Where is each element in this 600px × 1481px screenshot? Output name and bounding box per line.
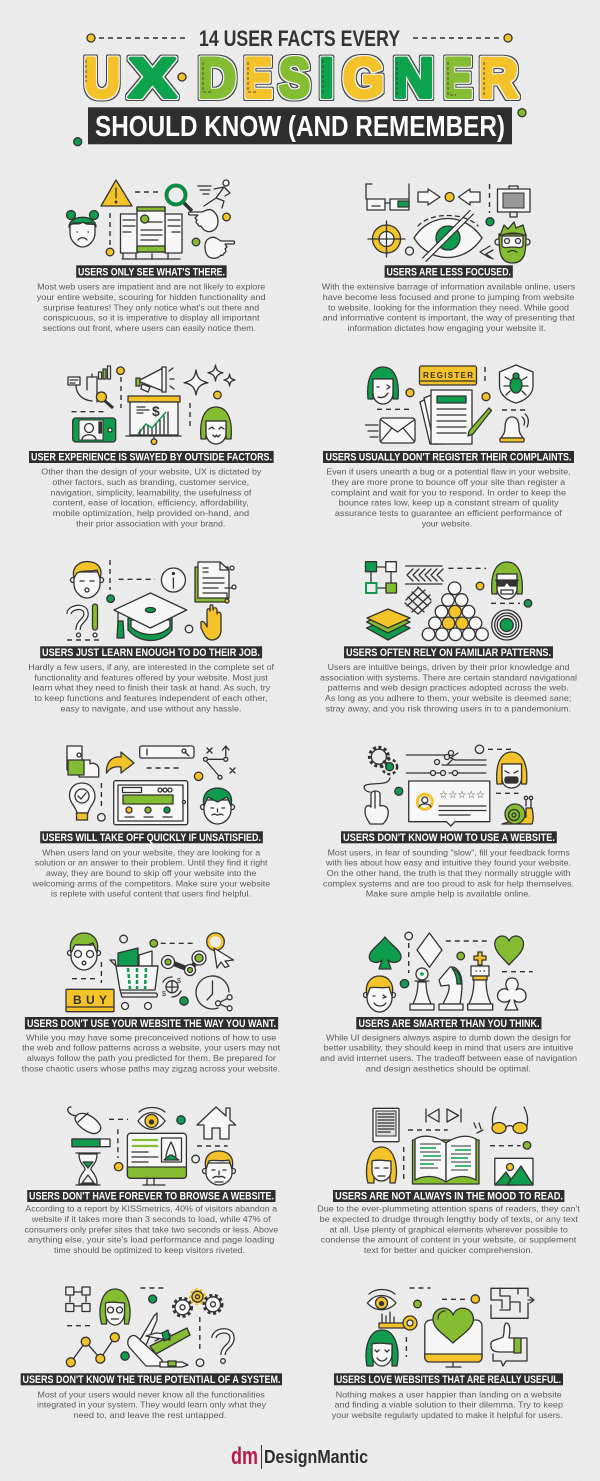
icon: bell bbox=[500, 414, 528, 442]
icon: club bbox=[498, 978, 526, 1010]
icon: man with green hair bbox=[200, 788, 234, 824]
body text: your website. bbox=[422, 518, 472, 528]
body text: assurance tests to guarantee an efficient performance of bbox=[335, 508, 562, 518]
icon: tablet bbox=[114, 781, 188, 825]
icon cluster 12 bbox=[367, 1107, 533, 1185]
body text: those chaotic users whose paths may zigzag across your website. bbox=[22, 1063, 280, 1073]
icon cluster 1 bbox=[66, 180, 234, 259]
body text: always follow the path you predicted for them. Be prepared for bbox=[27, 1053, 276, 1063]
title: UX DESIGNER bbox=[84, 46, 518, 109]
body text: Hardly a few users, if any, are interested in the complete set of bbox=[28, 662, 275, 672]
body text: need to, and leave the rest untapped. bbox=[74, 1410, 226, 1420]
title block bbox=[74, 26, 526, 146]
icon: pencil bbox=[468, 408, 492, 436]
icon cluster 11 bbox=[68, 1107, 236, 1185]
icon cluster 13 bbox=[66, 1287, 232, 1367]
body text bbox=[317, 1204, 580, 1255]
icon: phone bbox=[73, 418, 116, 442]
title: UX DESIGNER: E bbox=[244, 46, 272, 109]
icon: thumbs up bbox=[491, 1323, 527, 1366]
panel 2: users are less focused bbox=[322, 184, 576, 333]
icon cluster 7 bbox=[67, 746, 235, 825]
panel 7: users will take off quickly bbox=[31, 746, 270, 899]
panel 5: users just learn enough bbox=[28, 560, 275, 713]
body text: sections out front, where users can easily notice them. bbox=[43, 323, 256, 333]
icon cluster 10 bbox=[364, 932, 533, 1012]
body text: When users land on your website, they are looking for a bbox=[42, 847, 260, 857]
icon: chess pawn bbox=[410, 968, 434, 1010]
body text: patterns and web design practices adopted across the web. bbox=[328, 683, 569, 693]
panel 1: users only see what's there bbox=[37, 180, 266, 333]
icon: register sign bbox=[420, 366, 476, 385]
body text: your entire website, scouring for hidden functionality and bbox=[37, 292, 266, 302]
body text: Other than the design of your website, UX is dictated by bbox=[41, 467, 262, 477]
body text: have become less focused and prone to jumping from website bbox=[323, 292, 575, 302]
title: UX DESIGNER: U bbox=[84, 46, 120, 109]
body text bbox=[320, 1032, 577, 1073]
icon: chat and chart bbox=[68, 366, 110, 402]
body text: information dictates how engaging your website it. bbox=[348, 323, 546, 333]
body text: While you may have some preconceived notions of how to use bbox=[26, 1032, 276, 1042]
body text: navigation, simplicity, learnability, the usefulness of bbox=[50, 487, 252, 497]
icon cluster 3 bbox=[68, 365, 235, 445]
icon: happy girl bbox=[201, 407, 231, 444]
icon: question mark bbox=[214, 1331, 232, 1363]
icon: hourglass bbox=[76, 1153, 100, 1185]
icon: pattern nodes bbox=[366, 562, 396, 593]
body text: Due to the ever-plummeting attention spans of readers, they can't bbox=[317, 1204, 580, 1214]
body text: time should be optimized to keep visitors riveted. bbox=[54, 1245, 245, 1255]
panel 11: users don't have forever bbox=[24, 1107, 278, 1255]
heading: USERS JUST LEARN ENOUGH TO DO THEIR JOB. bbox=[42, 647, 260, 659]
body text: anything else, your site's load performance and page loading bbox=[28, 1235, 275, 1245]
icon: monitor bbox=[498, 186, 530, 217]
body text: On the other hand, the truth is that they normally struggle with bbox=[327, 868, 571, 878]
icon cluster 9 bbox=[66, 933, 234, 1012]
body text: Even if users unearth a bug or a potential flaw in your website, bbox=[326, 467, 571, 477]
heading: USERS DON'T KNOW THE TRUE POTENTIAL OF A SYSTEM. bbox=[22, 1374, 280, 1386]
icon: light bulb bbox=[70, 783, 95, 820]
title: UX DESIGNER: I bbox=[319, 46, 334, 109]
body text: Users are intuitive beings, driven by their prior knowledge and bbox=[328, 662, 570, 672]
body text: Most of your users would never know all the functionalities bbox=[38, 1389, 265, 1399]
icon: circle pyramid bbox=[422, 582, 488, 641]
icon: girl with lime hair bbox=[100, 1289, 130, 1325]
icon: currency globe: $ bbox=[177, 978, 181, 985]
icon: boy with glasses bbox=[68, 933, 100, 970]
icon: landscape picture bbox=[495, 1158, 533, 1185]
icon: chevron band bbox=[406, 566, 443, 584]
body text: Nothing makes a user happier than landing on a website bbox=[336, 1389, 562, 1399]
title: UX DESIGNER: X bbox=[129, 46, 176, 109]
panel 8: users don't know how to use a website bbox=[323, 745, 574, 899]
icon: eye bbox=[367, 1290, 396, 1310]
icon: monitor with heart bbox=[425, 1308, 482, 1367]
title ornaments bbox=[87, 34, 512, 42]
body text: functionality and features offered by your website. Most just bbox=[34, 672, 268, 682]
icon: info circle bbox=[161, 568, 185, 592]
body text: they are more prone to bounce off your site than register a bbox=[332, 477, 565, 487]
panel 12: users are not always in the mood to read bbox=[317, 1107, 580, 1255]
icon: mouse hand bbox=[364, 778, 390, 824]
heading: USERS OFTEN RELY ON FAMILIAR PATTERNS. bbox=[346, 647, 551, 659]
title line: 14 user facts every: 14 USER FACTS EVERY bbox=[199, 26, 400, 51]
heading: USERS ONLY SEE WHAT'S THERE. bbox=[78, 266, 225, 278]
body text: complex systems and are too proud to ask for help themselves. bbox=[323, 878, 574, 888]
body text: Make sure ample help is available online. bbox=[366, 889, 531, 899]
body text bbox=[28, 662, 275, 713]
icon: puzzle bbox=[67, 746, 99, 777]
icon: bug shield bbox=[500, 365, 533, 403]
icon: presentation board bbox=[126, 396, 181, 445]
icon: review bubble: ☆☆☆☆☆ bbox=[439, 790, 485, 801]
icon cluster 6 bbox=[366, 562, 532, 641]
body text: complaint and wait for you to respond. In order to keep the bbox=[331, 487, 566, 497]
body text: conspicuous, so it is imperative to display all important bbox=[43, 313, 260, 323]
icon: document with nodes bbox=[195, 562, 236, 603]
icon: circuit lines bbox=[406, 750, 486, 776]
body text: to website, looking for the information they need. While good bbox=[328, 302, 569, 312]
icon: blond boy bbox=[70, 562, 104, 598]
body text bbox=[31, 847, 270, 899]
body text bbox=[37, 1389, 267, 1420]
body text: stray away, and you risk throwing users in to a pandemonium. bbox=[326, 703, 571, 713]
icon: concentric circles bbox=[492, 610, 522, 640]
icon: key bbox=[379, 1312, 417, 1330]
icon: grumpy man bbox=[202, 1151, 236, 1185]
icon: desktop with rocket bbox=[127, 1133, 186, 1185]
icon cluster 14 bbox=[366, 1288, 534, 1367]
icon: clock and share bbox=[196, 976, 232, 1011]
icon: pointing hands bbox=[188, 210, 234, 258]
panel 14: users love websites that are really useful bbox=[332, 1288, 563, 1420]
panel 9: users don't use your website the way you want bbox=[22, 933, 281, 1073]
body text: to keep functions and features independent of each other, bbox=[34, 693, 268, 703]
footer logo: dm bbox=[231, 1443, 258, 1470]
icon: buy button bbox=[66, 989, 114, 1012]
icon: question and exclamation bbox=[67, 604, 103, 640]
icon: target bbox=[368, 221, 405, 257]
heading: USERS ARE SMARTER THAN YOU THINK. bbox=[358, 1018, 540, 1030]
icon: spade bbox=[369, 937, 401, 969]
icon: stacked layers bbox=[367, 609, 410, 640]
body text: is replete with useful content that users find helpful. bbox=[51, 889, 251, 899]
panel 4: users usually don't register bbox=[323, 365, 574, 528]
icon: review bubble bbox=[409, 781, 490, 826]
icon: search bar bbox=[140, 746, 194, 758]
body text: According to a report by KISSmetrics, 40% of visitors abandon a bbox=[25, 1204, 277, 1214]
icon: runner bbox=[198, 180, 230, 208]
body text bbox=[22, 1032, 281, 1073]
icon: curved arrow bbox=[106, 752, 134, 773]
heading: USER EXPERIENCE IS SWAYED BY OUTSIDE FACTORS. bbox=[31, 452, 272, 464]
icon cluster 4 bbox=[366, 365, 533, 444]
body text: the web and follow patterns across a website, your users may not bbox=[22, 1043, 281, 1053]
body text: consumers only prefer sites that take two seconds or less. Above bbox=[24, 1224, 278, 1234]
body text: your website regularly updated to make it helpful for users. bbox=[332, 1410, 563, 1420]
icon: house bbox=[197, 1107, 236, 1139]
icon: chess king bbox=[468, 952, 493, 1010]
body text: their prior association with your brand. bbox=[76, 518, 225, 528]
body text: website if it takes more than 3 seconds to load, while 47% of bbox=[31, 1214, 271, 1224]
body text: Most users, in fear of sounding "slow", fill your feedback forms bbox=[328, 847, 570, 857]
icon: e-reader bbox=[373, 1108, 399, 1142]
icon cluster 2 bbox=[366, 184, 530, 263]
icon: document stack bbox=[420, 390, 472, 444]
footer logo bbox=[231, 1443, 368, 1470]
icon: bored girl bbox=[367, 1147, 396, 1183]
body text: association with systems. There are certain standard navigational bbox=[320, 672, 577, 682]
body text: other factors, such as branding, customer service, bbox=[52, 477, 249, 487]
body text bbox=[326, 467, 571, 528]
icon: mesh diamond bbox=[405, 587, 431, 614]
title: UX DESIGNER: E bbox=[444, 46, 472, 109]
title: UX DESIGNER: S bbox=[279, 46, 310, 109]
icon: crossed eye bbox=[414, 212, 482, 260]
body text: and design aesthetics should be optimal. bbox=[366, 1063, 531, 1073]
icon: angry girl bbox=[497, 752, 527, 788]
icon: gears bbox=[174, 1290, 222, 1316]
icon cluster 8 bbox=[364, 745, 533, 826]
icon: heart bbox=[495, 936, 524, 965]
body text bbox=[24, 1204, 278, 1255]
icon: raised hand bbox=[201, 605, 221, 640]
body text: be expected to drudge through lengthy body of texts, or any text bbox=[320, 1214, 579, 1224]
heading: USERS ARE LESS FOCUSED. bbox=[386, 266, 511, 278]
body text bbox=[320, 662, 577, 713]
icon: gears bbox=[369, 747, 397, 774]
body text: and informative content is important, the way of presenting that bbox=[323, 313, 575, 323]
panel 3: user experience is swayed bbox=[29, 365, 274, 528]
icon: chess knight bbox=[439, 967, 463, 1010]
body text bbox=[41, 467, 262, 528]
icon: progress bar bbox=[72, 1139, 110, 1147]
icon: currency globe bbox=[162, 977, 181, 998]
title: UX DESIGNER: R bbox=[479, 46, 518, 109]
icon: magnifier bbox=[166, 186, 192, 211]
footer logo: DesignMantic bbox=[264, 1447, 368, 1467]
body text: condense the amount of content in your website, or supplement bbox=[321, 1235, 577, 1245]
body text: Most web users are impatient and are not likely to explore bbox=[37, 282, 265, 292]
body text: and avid internet users. The tradeoff between ease of navigation bbox=[320, 1053, 577, 1063]
panel 13: users don't know the true potential bbox=[21, 1287, 282, 1420]
body text: at all. Use plenty of graphical elements wherever possible to bbox=[330, 1224, 568, 1234]
heading: USERS DON'T USE YOUR WEBSITE THE WAY YOU WANT. bbox=[27, 1018, 276, 1030]
icon: eye bbox=[138, 1108, 165, 1129]
icon: warning triangle bbox=[101, 180, 132, 206]
icon: computer mouse bbox=[68, 1107, 101, 1134]
panel 6: users often rely on familiar patterns bbox=[320, 562, 577, 713]
body text: integrated in your system. They would learn only what they bbox=[37, 1400, 267, 1410]
body text: learn what they need to finish their task at hand. As such, try bbox=[32, 683, 271, 693]
icon: media controls bbox=[426, 1109, 461, 1122]
body text: welcoming arms of the competitors. Make sure your website bbox=[31, 878, 270, 888]
body text bbox=[322, 282, 576, 333]
banner dots bbox=[74, 109, 526, 146]
body text: content, ease of location, efficiency, affordability, bbox=[53, 498, 249, 508]
icon: arrows and dot bbox=[418, 189, 480, 205]
title: UX DESIGNER: G bbox=[343, 46, 384, 109]
icon: tactics diagram bbox=[204, 746, 235, 779]
icon: glasses bbox=[366, 184, 409, 210]
icon: magnifier small bbox=[96, 392, 113, 408]
icon: graduation cap bbox=[114, 593, 187, 640]
icon: register sign: REGISTER bbox=[423, 371, 473, 380]
panel 10: users are smarter than you think bbox=[320, 932, 577, 1073]
title banner: should know: SHOULD KNOW (AND REMEMBER) bbox=[95, 111, 505, 143]
body text bbox=[332, 1389, 563, 1420]
icon: mail with speed lines bbox=[366, 418, 415, 443]
body text: As long as you adhere to them, your website is deemed sane; bbox=[325, 693, 571, 703]
icon: girl with sunglasses bbox=[492, 562, 522, 599]
icon: line chart bbox=[66, 1333, 119, 1367]
icon cluster 5 bbox=[67, 560, 236, 640]
body text: text for better and quicker comprehension. bbox=[364, 1245, 533, 1255]
body text: With the extensive barrage of information available online, users bbox=[322, 282, 576, 292]
icon: girl with heart eyes bbox=[366, 1330, 398, 1366]
icon: bearded man bbox=[495, 222, 530, 263]
body text: While UI designers always aspire to dumb down the design for bbox=[326, 1032, 571, 1042]
body text: and finding a viable solution to their dilemma. Try to keep bbox=[334, 1400, 563, 1410]
heading: USERS ARE NOT ALWAYS IN THE MOOD TO READ. bbox=[335, 1191, 563, 1203]
title: UX DESIGNER: N bbox=[393, 46, 434, 109]
icon: maze bbox=[491, 1288, 534, 1318]
body text: surprise features! They only notice what's out there and bbox=[43, 302, 259, 312]
body text: easy to navigate, and use without any hassle. bbox=[60, 703, 242, 713]
body text: solution or an answer to their problem. Until they find it right bbox=[35, 858, 268, 868]
title: UX DESIGNER: D bbox=[198, 46, 236, 109]
heading: USERS WILL TAKE OFF QUICKLY IF UNSATISFIED. bbox=[42, 832, 261, 844]
icon: snail bbox=[502, 796, 533, 824]
body text: better usability, they should keep in mind that users are intuitive bbox=[324, 1043, 573, 1053]
icon: buy button: BUY bbox=[73, 993, 107, 1007]
heading: USERS DON'T HAVE FOREVER TO BROWSE A WEBSITE. bbox=[29, 1191, 274, 1203]
icon: node squares bbox=[66, 1287, 90, 1312]
icon: winking girl bbox=[368, 367, 398, 404]
icon: sad girl face bbox=[66, 210, 98, 247]
body text: with lies about how easy and intuitive they found your website. bbox=[325, 858, 571, 868]
body text bbox=[323, 847, 574, 899]
heading: USERS DON'T KNOW HOW TO USE A WEBSITE. bbox=[343, 832, 555, 844]
icon: click cursor bbox=[207, 933, 234, 968]
icon: diamond bbox=[417, 933, 442, 967]
icon: currency globe: $ bbox=[162, 991, 166, 998]
icon: web layout bbox=[120, 207, 182, 259]
icon: megaphone bbox=[136, 367, 174, 392]
body text: mobile optimization, help provided on-hand, and bbox=[53, 508, 249, 518]
body text: away, they are bound to skip off your website into the bbox=[46, 868, 257, 878]
icon: round glasses bbox=[474, 1107, 528, 1134]
icon: shopping cart bbox=[110, 948, 158, 1010]
icon: open book bbox=[412, 1136, 479, 1184]
icon: sparkle stars bbox=[184, 365, 235, 395]
body text: bounce rates low, keep up a constant stream of quality bbox=[339, 498, 559, 508]
icon: connected rings bbox=[162, 951, 206, 976]
icon: swiss tools bbox=[128, 1313, 190, 1367]
body text bbox=[37, 282, 266, 333]
icon: presentation board: $ bbox=[152, 403, 160, 419]
icon: winking boy bbox=[364, 976, 396, 1012]
